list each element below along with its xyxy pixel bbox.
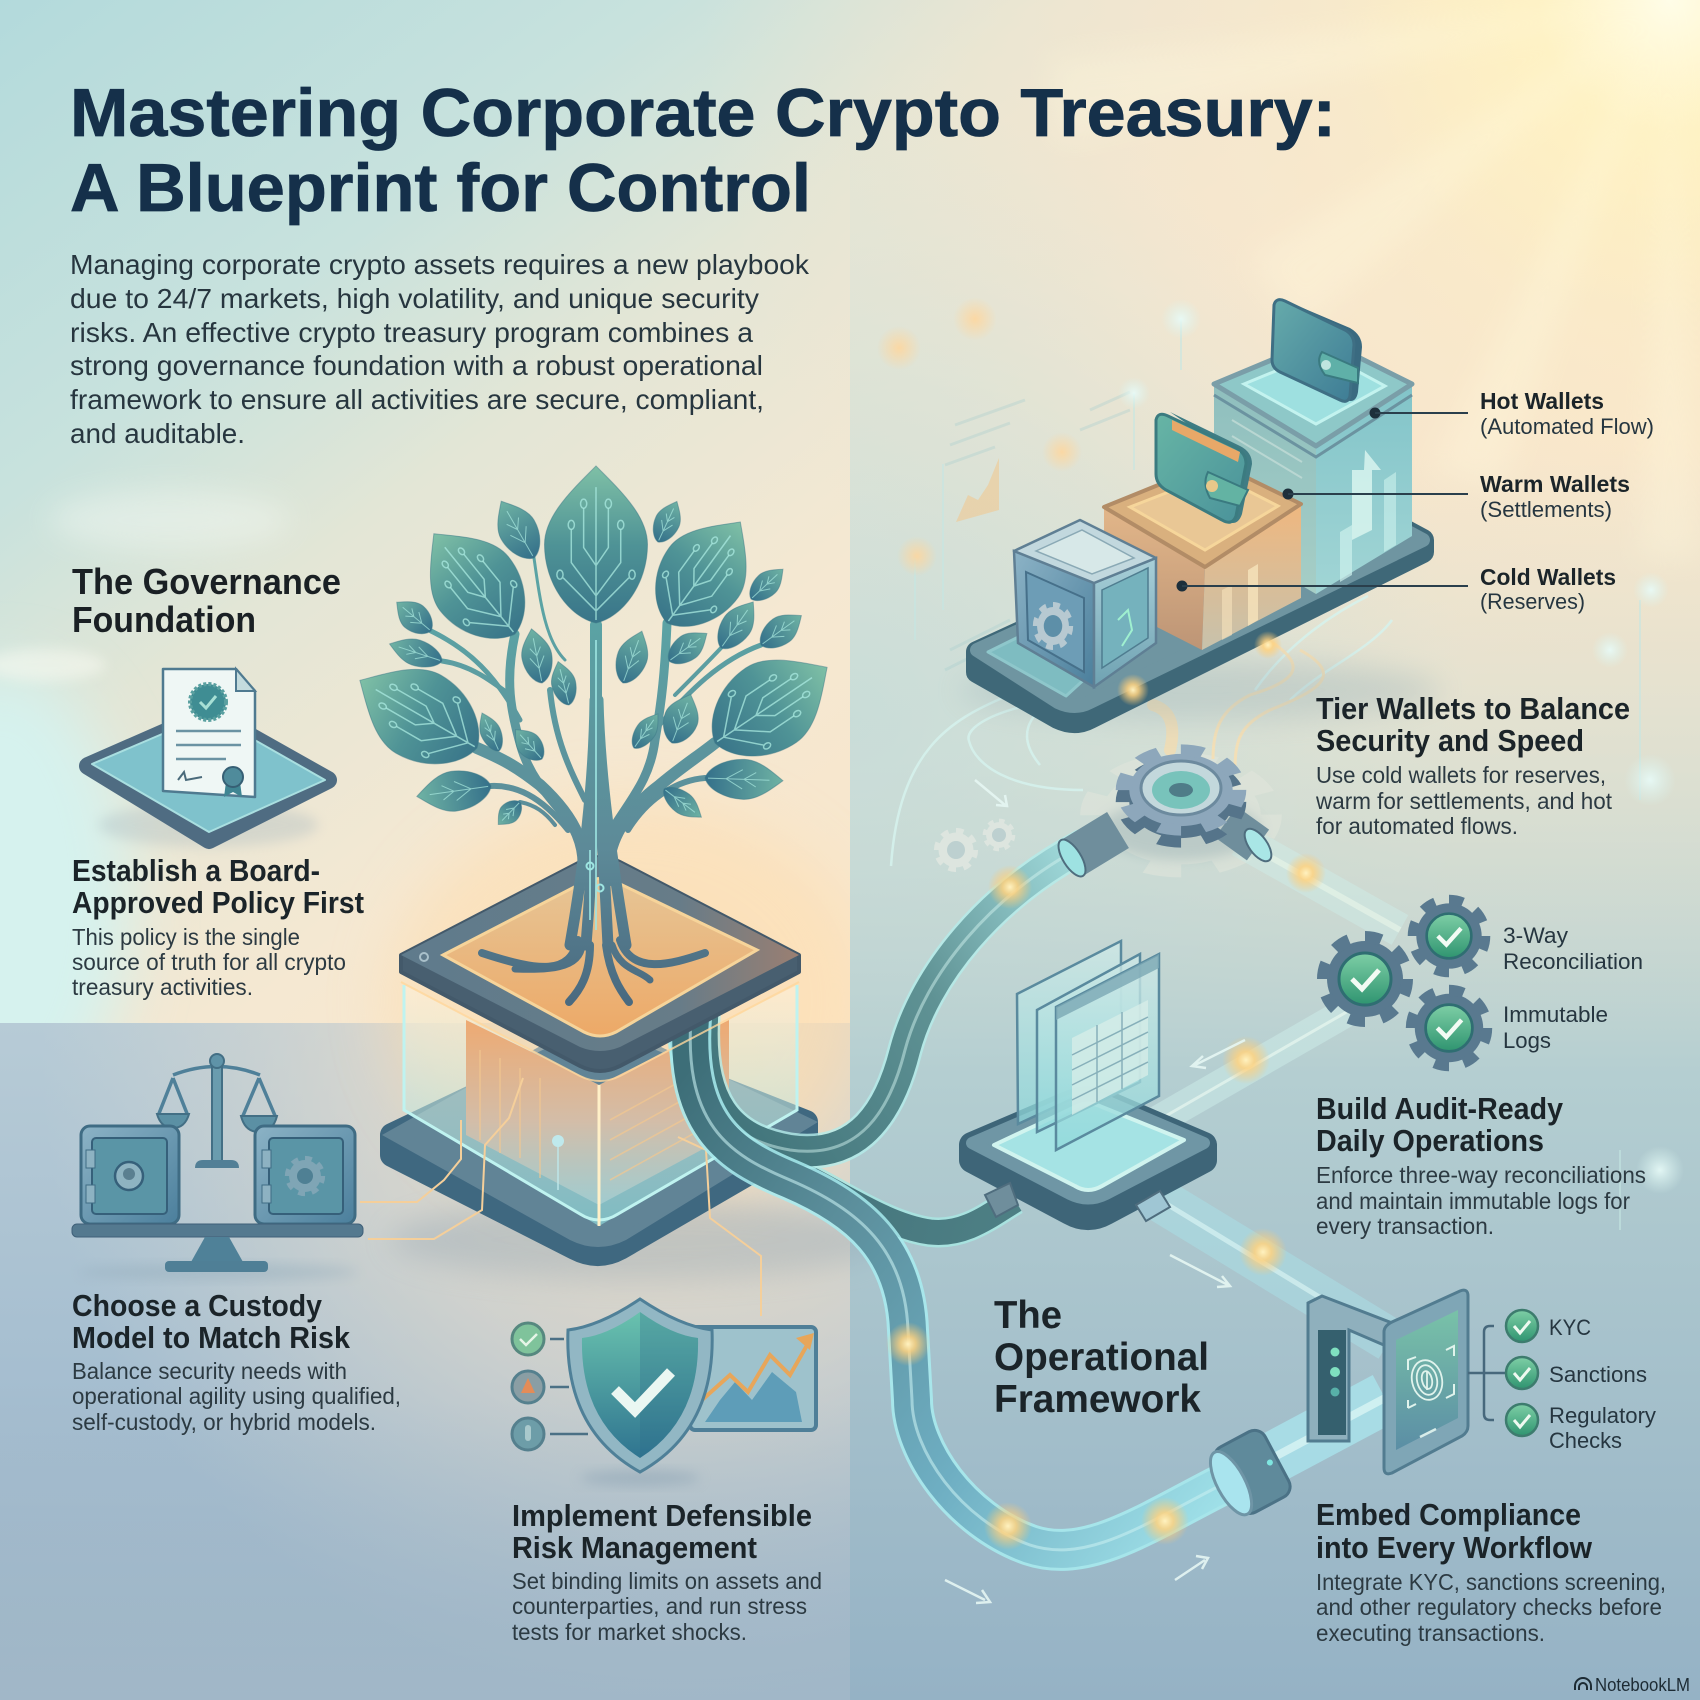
intro paragraph: and auditable. (70, 418, 245, 449)
compliance checklist: Checks (1549, 1428, 1622, 1453)
callouts: wallet tiers: Cold Wallets (1480, 564, 1616, 590)
text: tier wallets: Security and Speed (1316, 723, 1584, 758)
text: build audit-ready: Enforce three-way reconciliations (1316, 1162, 1646, 1188)
icon: policy document on tablet (88, 669, 328, 847)
callouts: wallet tiers: (Reserves) (1480, 589, 1585, 614)
pedestal: top slab with soil (401, 857, 799, 1081)
text: implement defensible risk management: Risk Management (512, 1530, 757, 1565)
icon: warm wallet (1156, 412, 1252, 523)
flow lines from wallet platform (891, 596, 1392, 866)
heading: the operational framework: Framework (994, 1378, 1201, 1421)
text: implement defensible risk management: counterparties, and run stress (512, 1593, 807, 1619)
intro paragraph: risks. An effective crypto treasury program combines a (70, 317, 753, 348)
leaves (337, 466, 852, 831)
text: establish a board-approved policy first: This policy is the single (72, 924, 300, 950)
text: embed compliance: Embed Compliance (1316, 1497, 1581, 1532)
brand mark: NotebookLM: NotebookLM (1595, 1675, 1690, 1695)
compliance checklist: Sanctions (1549, 1362, 1647, 1387)
text: embed compliance: executing transactions. (1316, 1620, 1545, 1646)
pipe to compliance (690, 1005, 1235, 1550)
text: establish a board-approved policy first (72, 853, 364, 1000)
text: build audit-ready (1316, 1091, 1646, 1239)
text: choose a custody model: Model to Match Risk (72, 1320, 351, 1355)
title: A Blueprint for Control (70, 150, 811, 226)
text: build audit-ready: Daily Operations (1316, 1123, 1544, 1158)
pedestal: base slab and glass core (360, 985, 890, 1316)
glass tubes (1150, 840, 1400, 1340)
text: build audit-ready: every transaction. (1316, 1213, 1494, 1239)
compliance checklist: Regulatory (1549, 1403, 1657, 1428)
intro paragraph: framework to ensure all activities are secure, compliant, (70, 384, 764, 415)
text: tier wallets: warm for settlements, and hot (1315, 788, 1613, 814)
text: embed compliance: and other regulatory checks before (1316, 1594, 1662, 1620)
icon: ledger on platform (972, 941, 1204, 1221)
text: implement defensible risk management: Implement Defensible (512, 1498, 812, 1533)
text: implement defensible risk management: tests for market shocks. (512, 1619, 747, 1645)
callouts: wallet tiers: (Automated Flow) (1480, 414, 1654, 439)
background circuitry and bokeh (877, 297, 1684, 1230)
labels: audit checks: 3-Way (1503, 923, 1569, 948)
icon: custody scales with two safes (72, 1054, 363, 1280)
pipes: governance to operations (680, 845, 1385, 1550)
heading: the operational framework (994, 1294, 1209, 1421)
callouts: wallet tiers (1176, 388, 1654, 614)
glowing nodes and flow arrows (886, 631, 1326, 1603)
icon: hot wallet (1272, 300, 1362, 401)
heading: the governance foundation: Foundation (72, 599, 256, 640)
heading: the operational framework: Operational (994, 1336, 1209, 1379)
icon: compliance gate and phone (1308, 1290, 1468, 1474)
text: establish a board-approved policy first: Establish a Board- (72, 853, 320, 888)
text: embed compliance (1316, 1497, 1666, 1646)
title: Mastering Corporate Crypto Treasury: (70, 75, 1336, 151)
compliance checklist (1468, 1310, 1657, 1453)
text: embed compliance: into Every Workflow (1316, 1530, 1593, 1565)
illustration: circuit tree (337, 466, 852, 1002)
labels: audit checks: Reconciliation (1503, 949, 1643, 974)
icon: background gears (937, 760, 1269, 870)
text: choose a custody model: Balance security needs with (72, 1358, 347, 1384)
text: implement defensible risk management (512, 1498, 822, 1645)
heading: the governance foundation (72, 561, 341, 640)
intro paragraph: due to 24/7 markets, high volatility, and unique security (70, 283, 759, 314)
text: embed compliance: Integrate KYC, sanctions screening, (1316, 1569, 1666, 1595)
text: establish a board-approved policy first: Approved Policy First (72, 885, 364, 920)
text: establish a board-approved policy first: treasury activities. (72, 974, 253, 1000)
text: establish a board-approved policy first: source of truth for all crypto (72, 949, 346, 975)
hot wallet box (1214, 339, 1412, 594)
heading: the operational framework: The (994, 1294, 1062, 1337)
callouts: wallet tiers: Hot Wallets (1480, 388, 1604, 414)
text: choose a custody model (72, 1288, 401, 1435)
pipe to gear (703, 845, 1085, 1151)
labels: audit checks: Immutable (1503, 1002, 1608, 1027)
intro paragraph: Managing corporate crypto assets requires a new playbook (70, 249, 810, 280)
callouts: wallet tiers: Warm Wallets (1480, 471, 1630, 497)
cold safe (1014, 520, 1156, 687)
text: choose a custody model: self-custody, or hybrid models. (72, 1409, 376, 1435)
warm wallet box (1104, 462, 1301, 650)
callouts: wallet tiers: (Settlements) (1480, 497, 1612, 522)
icon: audit gears (1323, 900, 1487, 1066)
text: tier wallets (1315, 691, 1630, 839)
pipe to ledger (680, 1005, 1015, 1232)
text: tier wallets: Tier Wallets to Balance (1316, 691, 1630, 726)
icon: pipe ring (1201, 1426, 1294, 1522)
text: implement defensible risk management: Set binding limits on assets and (512, 1568, 822, 1594)
text: build audit-ready: and maintain immutable logs for (1316, 1188, 1630, 1214)
labels: audit checks: Logs (1503, 1028, 1551, 1053)
heading: the governance foundation: The Governance (72, 561, 341, 602)
icon: risk shield and chart (512, 1299, 816, 1486)
compliance checklist: KYC (1549, 1315, 1591, 1340)
title (70, 75, 1336, 226)
text: build audit-ready: Build Audit-Ready (1316, 1091, 1564, 1126)
intro paragraph (70, 249, 810, 449)
text: choose a custody model: operational agility using qualified, (72, 1383, 401, 1409)
text: tier wallets: Use cold wallets for reserves, (1316, 762, 1606, 788)
labels: audit checks (1503, 923, 1643, 1053)
text: choose a custody model: Choose a Custody (72, 1288, 323, 1323)
text: tier wallets: for automated flows. (1316, 813, 1518, 839)
intro paragraph: strong governance foundation with a robust operational (70, 350, 763, 381)
icon: central gear junction (1053, 750, 1276, 881)
wallet tiers platform and stacks (960, 300, 1440, 722)
